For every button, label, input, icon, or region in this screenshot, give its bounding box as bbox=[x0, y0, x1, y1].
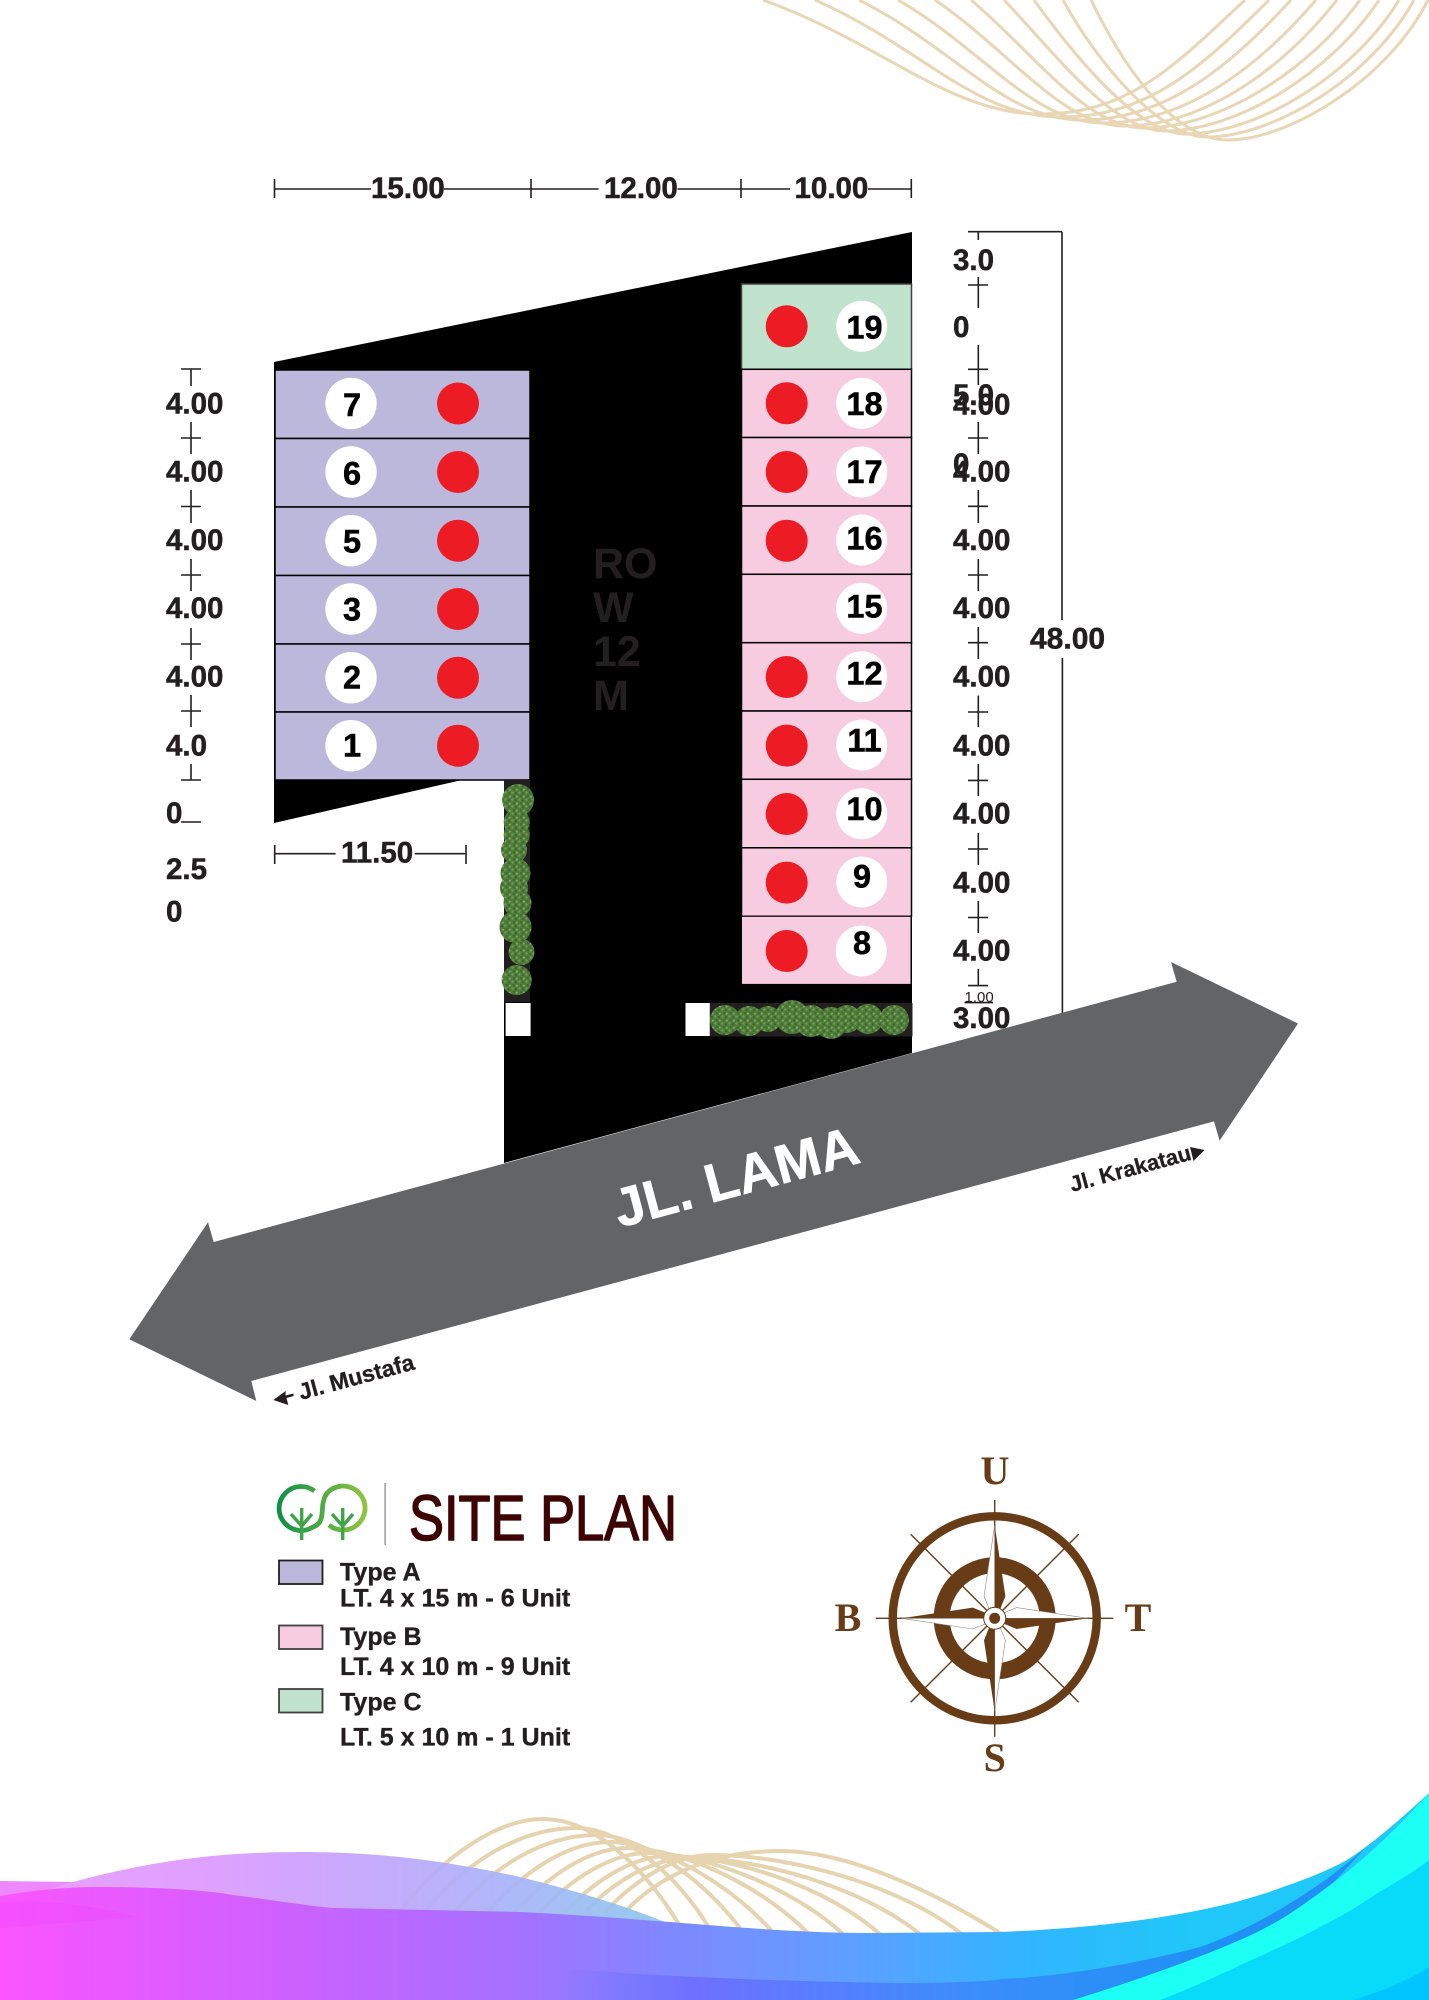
lot 3: 3 bbox=[343, 592, 361, 628]
top decorative wave lines bbox=[763, 0, 1428, 140]
road arrow JL. LAMA bbox=[129, 962, 1298, 1401]
left dimension chain: 4.00 bbox=[166, 524, 223, 557]
icon: compass rose bbox=[835, 1448, 1152, 1780]
road label ROW 12 M bbox=[593, 540, 658, 720]
top dimension chain bbox=[274, 172, 911, 205]
right dimension chain: 3.00 bbox=[953, 1002, 1010, 1035]
lot 17 bbox=[742, 438, 912, 506]
lot 15 bbox=[742, 574, 912, 643]
legend type A: Type A bbox=[340, 1559, 421, 1587]
site land black shape bbox=[274, 232, 912, 1163]
horizontal hedge bbox=[710, 1000, 912, 1039]
right dimension chain: 4.00 bbox=[953, 388, 1010, 421]
road label ROW 12 M: 12 bbox=[593, 628, 641, 676]
panel: type B and C lots bbox=[742, 284, 912, 984]
lot 6: 6 bbox=[343, 456, 361, 492]
left dimension chain: 4.00 bbox=[166, 661, 223, 694]
right dimension chain: 4.00 bbox=[953, 456, 1010, 489]
left dimension chain bbox=[166, 369, 223, 929]
direction label Jl. Mustafa: Jl. Mustafa bbox=[296, 1349, 417, 1405]
icon: compass rose: T bbox=[1125, 1595, 1152, 1640]
right dimension chain: 4.00 bbox=[953, 524, 1010, 557]
legend type A bbox=[279, 1559, 571, 1613]
road arrow JL. LAMA: JL. LAMA bbox=[607, 1115, 865, 1239]
white gate square left bbox=[506, 1003, 531, 1036]
right dimension chain: 4.00 bbox=[953, 592, 1010, 625]
lot 10 bbox=[742, 779, 912, 848]
lot 18 bbox=[742, 369, 912, 438]
lot 9: 9 bbox=[853, 859, 871, 895]
right dimension chain: 3.0 bbox=[953, 244, 994, 277]
top dimension chain: 15.00 bbox=[371, 172, 445, 205]
lot 16 bbox=[742, 506, 912, 574]
lot 19 bbox=[742, 284, 912, 369]
lot 9 bbox=[742, 848, 912, 916]
icon: compass rose: U bbox=[981, 1448, 1009, 1493]
lot 8 bbox=[742, 916, 911, 984]
legend type B: Type B bbox=[340, 1623, 422, 1651]
legend type B bbox=[279, 1623, 571, 1681]
lot 6 bbox=[275, 438, 530, 507]
legend bbox=[279, 1559, 571, 1752]
right dimension chain: 1.00 bbox=[964, 989, 994, 1006]
legend type B: LT. 4 x 10 m - 9 Unit bbox=[340, 1653, 571, 1681]
lot 10: 10 bbox=[846, 791, 883, 827]
right dimension chain: 4.00 bbox=[953, 867, 1010, 900]
right dimension chain: 5.0 bbox=[953, 379, 994, 412]
white gate square right bbox=[686, 1003, 710, 1036]
legend type C bbox=[279, 1689, 571, 1752]
lot 2 bbox=[275, 644, 530, 712]
right dimension chain: 0 bbox=[953, 448, 969, 481]
right dimension chain: 4.00 bbox=[953, 730, 1010, 763]
logo divider bbox=[384, 1483, 386, 1545]
lot 1 bbox=[275, 712, 530, 780]
icon: compass rose: B bbox=[835, 1595, 861, 1640]
icon: compass rose: S bbox=[984, 1735, 1006, 1780]
panel: type A lots bbox=[275, 370, 530, 780]
left dimension chain: 4.0 bbox=[166, 730, 207, 763]
lot 5 bbox=[275, 507, 530, 576]
right dimension chain: 4.00 bbox=[953, 935, 1010, 968]
lot 17: 17 bbox=[846, 454, 883, 490]
right dimension chain: 4.00 bbox=[953, 798, 1010, 831]
lot 18: 18 bbox=[846, 386, 883, 422]
road label ROW 12 M: M bbox=[593, 672, 629, 720]
lot 15: 15 bbox=[846, 588, 883, 624]
road label ROW 12 M: W bbox=[593, 584, 634, 632]
lot 2: 2 bbox=[343, 660, 361, 696]
lot 7 bbox=[275, 370, 530, 438]
lower left dimension 11.50: 11.50 bbox=[341, 837, 413, 870]
left dimension chain: 2.5 bbox=[166, 853, 207, 886]
right dimension chain bbox=[953, 232, 1105, 1035]
top dimension chain: 10.00 bbox=[794, 172, 868, 205]
lot 12: 12 bbox=[846, 656, 883, 692]
road label ROW 12 M: RO bbox=[593, 540, 658, 588]
lot 1: 1 bbox=[343, 728, 361, 764]
lower left dimension 11.50 bbox=[275, 837, 466, 870]
title SITE PLAN: SITE PLAN bbox=[409, 1482, 677, 1554]
logo: twin trees bbox=[279, 1486, 365, 1540]
legend type C: Type C bbox=[340, 1689, 422, 1717]
lot 12 bbox=[742, 643, 912, 711]
left dimension chain: 4.00 bbox=[166, 592, 223, 625]
right dimension chain: 4.00 bbox=[953, 661, 1010, 694]
right dimension chain: 0 bbox=[953, 311, 969, 344]
lot 8: 8 bbox=[853, 925, 871, 961]
lot 3 bbox=[275, 576, 530, 644]
legend type C: LT. 5 x 10 m - 1 Unit bbox=[340, 1724, 571, 1752]
direction label Jl. Krakatau: Jl. Krakatau bbox=[1067, 1140, 1194, 1197]
bottom colour waves bbox=[0, 1793, 1429, 2000]
lot 11: 11 bbox=[847, 723, 882, 759]
left dimension chain: 4.00 bbox=[166, 387, 223, 420]
left dimension chain: 0 bbox=[166, 797, 182, 830]
vertical hedge bbox=[500, 780, 534, 1002]
top dimension chain: 12.00 bbox=[604, 172, 678, 205]
left dimension chain: 0 bbox=[166, 896, 182, 929]
lot 19: 19 bbox=[846, 310, 883, 346]
bottom decorative wave lines bbox=[400, 1819, 1003, 1935]
left dimension chain: 4.00 bbox=[166, 456, 223, 489]
lot 11 bbox=[742, 711, 912, 779]
lot 5: 5 bbox=[343, 524, 361, 560]
lot 16: 16 bbox=[846, 520, 883, 556]
right dimension chain: 48.00 bbox=[1030, 622, 1105, 655]
legend type A: LT. 4 x 15 m - 6 Unit bbox=[340, 1585, 571, 1613]
lot 7: 7 bbox=[343, 387, 361, 423]
